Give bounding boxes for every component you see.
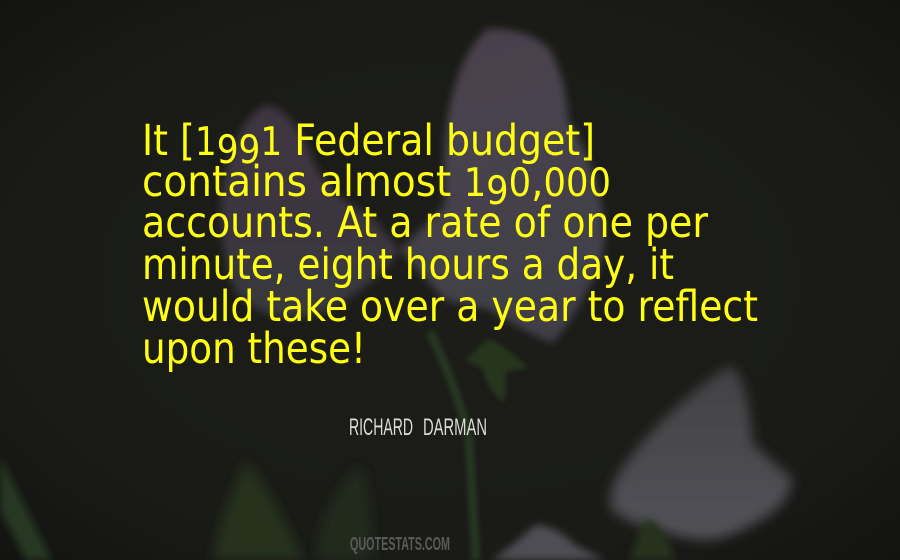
quote text: would take over a year to reflect <box>142 282 758 332</box>
quote text: 0 <box>509 161 531 206</box>
quote text: 99 <box>217 128 260 173</box>
quote text: Federal budget] <box>296 116 637 166</box>
author name: RICHARD <box>349 414 413 441</box>
quote text: 1 <box>260 120 282 165</box>
quote text: upon these! <box>142 324 366 374</box>
quote text: accounts. At a rate of one per <box>142 198 708 248</box>
watermark: QUOTESTATS.COM <box>350 534 450 554</box>
quote text: It [1 <box>142 116 220 166</box>
quote text: ,000 <box>531 157 618 207</box>
quote text: 9 <box>486 169 509 214</box>
quote text: minute, eight hours a day, it <box>142 240 674 290</box>
quote text: contains almost 1 <box>142 157 489 207</box>
author name: DARMAN <box>423 414 487 441</box>
quote text <box>142 116 758 374</box>
